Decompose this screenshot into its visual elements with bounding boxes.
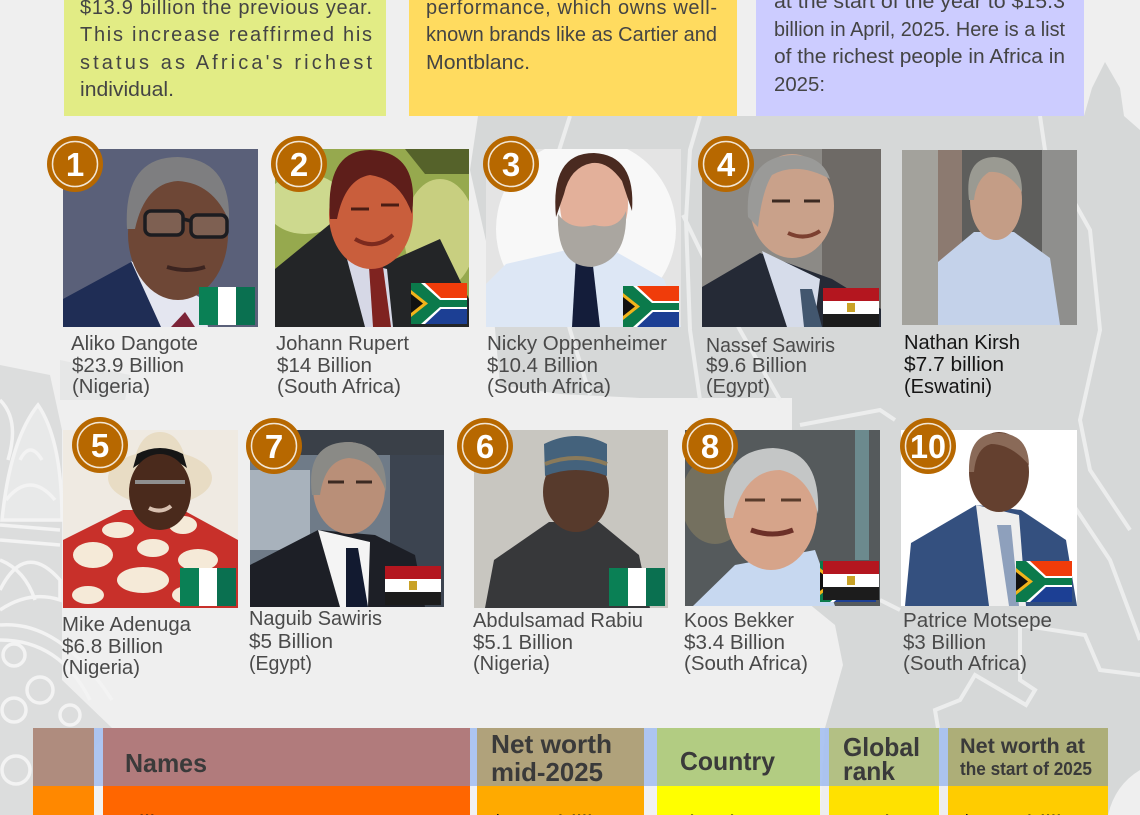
rank badge 6: 6 [476,428,494,465]
rank badge 10: 10 [910,428,946,465]
card: Naguib Sawiris [246,418,444,675]
caption: Aliko Dangote: Aliko Dangote [71,332,198,355]
flag: Nigeria [609,568,665,606]
card: Nicky Oppenheimer [483,136,681,398]
text box: Dangote summary: individual. [80,79,174,101]
text box: Dangote summary [64,0,386,116]
caption: Koos Bekker: (South Africa) [684,652,808,675]
rank badge 4: 4 [717,146,736,183]
header row: Country [680,746,776,776]
caption: Koos Bekker: Koos Bekker [684,609,794,632]
caption: Nathan Kirsh [904,331,1020,398]
caption: Abdulsamad Rabiu: Abdulsamad Rabiu [473,609,643,632]
header row: Net worth at [960,735,1085,758]
card: Nathan Kirsh [902,150,1077,398]
caption: Mike Adenuga: (Nigeria) [62,656,140,679]
photo: Nathan Kirsh [902,150,1077,325]
photo: Nassef Sawiris [702,149,881,327]
map of Africa silhouette [470,62,1140,815]
caption: Nicky Oppenheimer [487,332,667,398]
text box: introduction to the list: billion in April, 2025. Here is a list [774,19,1065,41]
caption: Patrice Motsepe [903,609,1052,675]
header row: Names [125,748,207,778]
photo: Naguib Sawiris [250,430,444,607]
caption: Nassef Sawiris: $9.6 Billion [706,354,807,377]
caption: Aliko Dangote: (Nigeria) [72,375,150,398]
caption: Nicky Oppenheimer: (South Africa) [487,375,611,398]
caption: Naguib Sawiris: Naguib Sawiris [249,607,382,630]
caption: Johann Rupert [276,332,409,398]
caption: Naguib Sawiris [249,607,382,675]
caption: Patrice Motsepe: (South Africa) [903,652,1027,675]
caption: Abdulsamad Rabiu [473,609,643,675]
flag: Nigeria [180,568,236,606]
caption: Nathan Kirsh: Nathan Kirsh [904,331,1020,354]
caption: Johann Rupert: Johann Rupert [276,332,409,355]
rank badge 6 [457,418,513,474]
card: Mike Adenuga [62,417,238,679]
header row: mid-2025 [491,757,603,787]
rank badge 4 [698,136,754,192]
rank badge 10 [900,418,956,474]
caption: Mike Adenuga: Mike Adenuga [62,613,192,636]
caption: Aliko Dangote [71,332,198,398]
rank badge 7: 7 [265,428,283,465]
caption: Koos Bekker: $3.4 Billion [684,631,785,654]
flag: Nigeria [199,287,255,325]
flags: South Africa behind Egypt [820,561,879,602]
map border lines [540,116,1140,728]
caption: Nathan Kirsh: $7.7 billion [904,353,1004,376]
caption: Abdulsamad Rabiu: $5.1 Billion [473,631,573,654]
header row: Global [843,732,920,762]
card: Abdulsamad Rabiu [457,418,668,675]
photo: Patrice Motsepe [901,430,1077,606]
header row: the start of 2025 [960,759,1092,779]
card: Patrice Motsepe [900,418,1077,675]
photo: Johann Rupert [275,149,469,327]
rank badge 1 [47,136,103,192]
header row: rank [843,756,896,786]
photo: Nicky Oppenheimer [486,149,681,327]
rank badge 1: 1 [66,146,84,183]
card: Nassef Sawiris [698,136,881,398]
flag: Egypt [385,566,441,605]
photo: Abdulsamad Rabiu [474,430,668,608]
caption: Nassef Sawiris [706,334,835,398]
text box: introduction to the list: 2025: [774,74,825,96]
rank badge 5 [72,417,128,473]
rank badge 3: 3 [502,146,520,183]
caption: Patrice Motsepe: Patrice Motsepe [903,609,1052,632]
text box: Rupert summary: known brands like as Cartier and [426,24,717,46]
caption: Nassef Sawiris: Nassef Sawiris [706,334,835,357]
text box: introduction to the list [756,0,1084,116]
patterned mandala corner [0,360,130,815]
photo: Aliko Dangote [63,149,258,327]
photo: Mike Adenuga [63,430,238,608]
rank badge 2: 2 [290,146,308,183]
caption: Nicky Oppenheimer: Nicky Oppenheimer [487,332,667,355]
rank badge 3 [483,136,539,192]
flag: South Africa [1016,561,1072,602]
caption: Koos Bekker [684,609,808,675]
caption: Nicky Oppenheimer: $10.4 Billion [487,354,598,377]
caption: Nassef Sawiris: (Egypt) [706,375,770,398]
header row: Net worth [491,729,612,759]
text box: Rupert summary [409,0,737,116]
caption: Nathan Kirsh: (Eswatini) [904,375,992,398]
rank badge 8: 8 [701,428,719,465]
card: Aliko Dangote [47,136,258,398]
photo: Koos Bekker [685,430,880,606]
rank badge 5: 5 [91,427,109,464]
rank badge 8 [682,418,738,474]
card: Koos Bekker [681,418,880,675]
text box: Dangote summary: This increase reaffirmed his [80,24,372,46]
caption: Patrice Motsepe: $3 Billion [903,631,986,654]
rank badge 7 [246,418,302,474]
flag: Egypt [823,288,879,327]
table column gaps [94,728,948,815]
caption: Johann Rupert: (South Africa) [277,375,401,398]
table of richest people [33,728,1108,815]
caption: Naguib Sawiris: (Egypt) [249,652,312,675]
caption: Johann Rupert: $14 Billion [277,354,372,377]
flag: South Africa [623,286,679,327]
caption: Naguib Sawiris: $5 Billion [249,630,333,653]
data row: Aliko Dangote [33,786,1108,815]
text box: introduction to the list: of the richest people in Africa in [774,46,1065,68]
text box: Rupert summary: Montblanc. [426,52,530,74]
caption: Mike Adenuga: $6.8 Billion [62,635,163,658]
text box: Dangote summary: status as Africa's richest [80,52,372,74]
rank badge 2 [271,136,327,192]
caption: Aliko Dangote: $23.9 Billion [72,354,184,377]
card: Johann Rupert [265,136,476,398]
caption: Mike Adenuga [62,613,192,679]
header row [33,728,1108,787]
caption: Abdulsamad Rabiu: (Nigeria) [473,652,550,675]
flag: South Africa [411,283,467,324]
